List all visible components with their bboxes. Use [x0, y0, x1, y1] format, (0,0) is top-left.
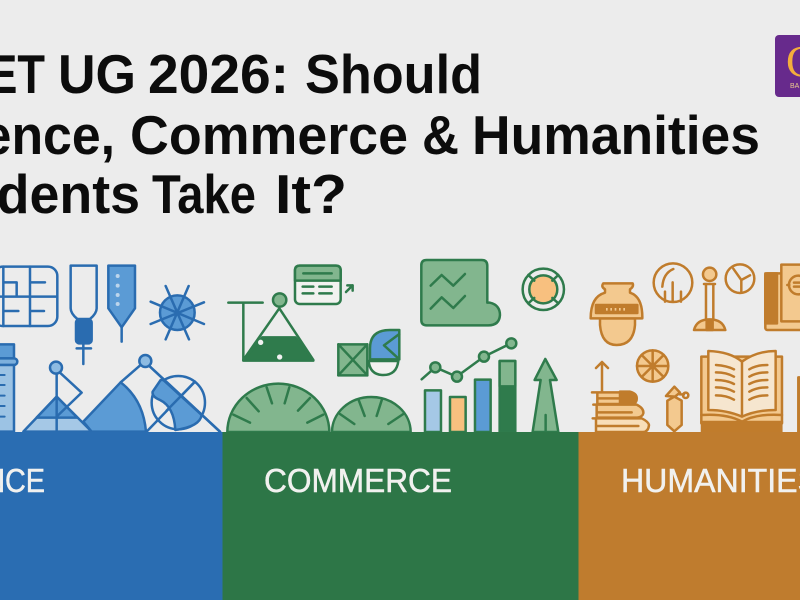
icon: crystal vial — [666, 387, 688, 431]
title: Humanities — [472, 104, 760, 166]
icon: test tube — [71, 266, 97, 364]
icon: spreadsheet card — [295, 266, 353, 304]
icon: box and pie — [338, 330, 399, 375]
icon: stacked books — [592, 362, 649, 432]
logo badge — [775, 35, 800, 97]
icon: circuit grid — [0, 267, 57, 326]
icon: bars and trend line — [422, 338, 516, 432]
humanities icons — [591, 263, 800, 432]
icon: bust urn — [591, 283, 642, 345]
icon: graduated cylinder — [0, 344, 17, 432]
panel: science — [0, 432, 222, 600]
icon: lamp post — [694, 268, 725, 330]
title: It? — [275, 163, 347, 225]
icon: large gauge — [227, 384, 329, 432]
icon: sector and protractor — [83, 355, 220, 432]
icon: edge column — [798, 377, 800, 432]
panel: humanities — [578, 432, 800, 600]
science icons — [0, 266, 220, 432]
icon: flask on stand — [228, 293, 313, 361]
icon: clock — [726, 264, 754, 293]
panel: commerce — [222, 432, 578, 600]
icon: ring target — [523, 269, 564, 310]
title: Should — [305, 43, 482, 105]
logo badge: BA — [790, 83, 800, 90]
icon: sun wheel — [151, 286, 204, 339]
commerce icons — [227, 260, 564, 432]
title — [0, 43, 760, 225]
title: Take — [152, 163, 256, 225]
title: & — [422, 104, 459, 166]
icon: open book — [701, 351, 782, 432]
label: commerce: COMMERCE — [264, 462, 452, 499]
icon: up arrow tower — [533, 359, 558, 432]
icon: pipette — [108, 266, 135, 342]
title: Commerce — [130, 104, 408, 166]
title: 2026: — [148, 43, 289, 105]
icon: globe dial — [654, 263, 692, 302]
title: UG — [58, 43, 136, 105]
icon: pendulum triangle — [23, 362, 92, 432]
icon: small gauge — [332, 397, 411, 432]
icon: line document — [421, 260, 500, 325]
icon: orange wheel — [637, 350, 668, 382]
icon: document cards — [765, 265, 800, 330]
